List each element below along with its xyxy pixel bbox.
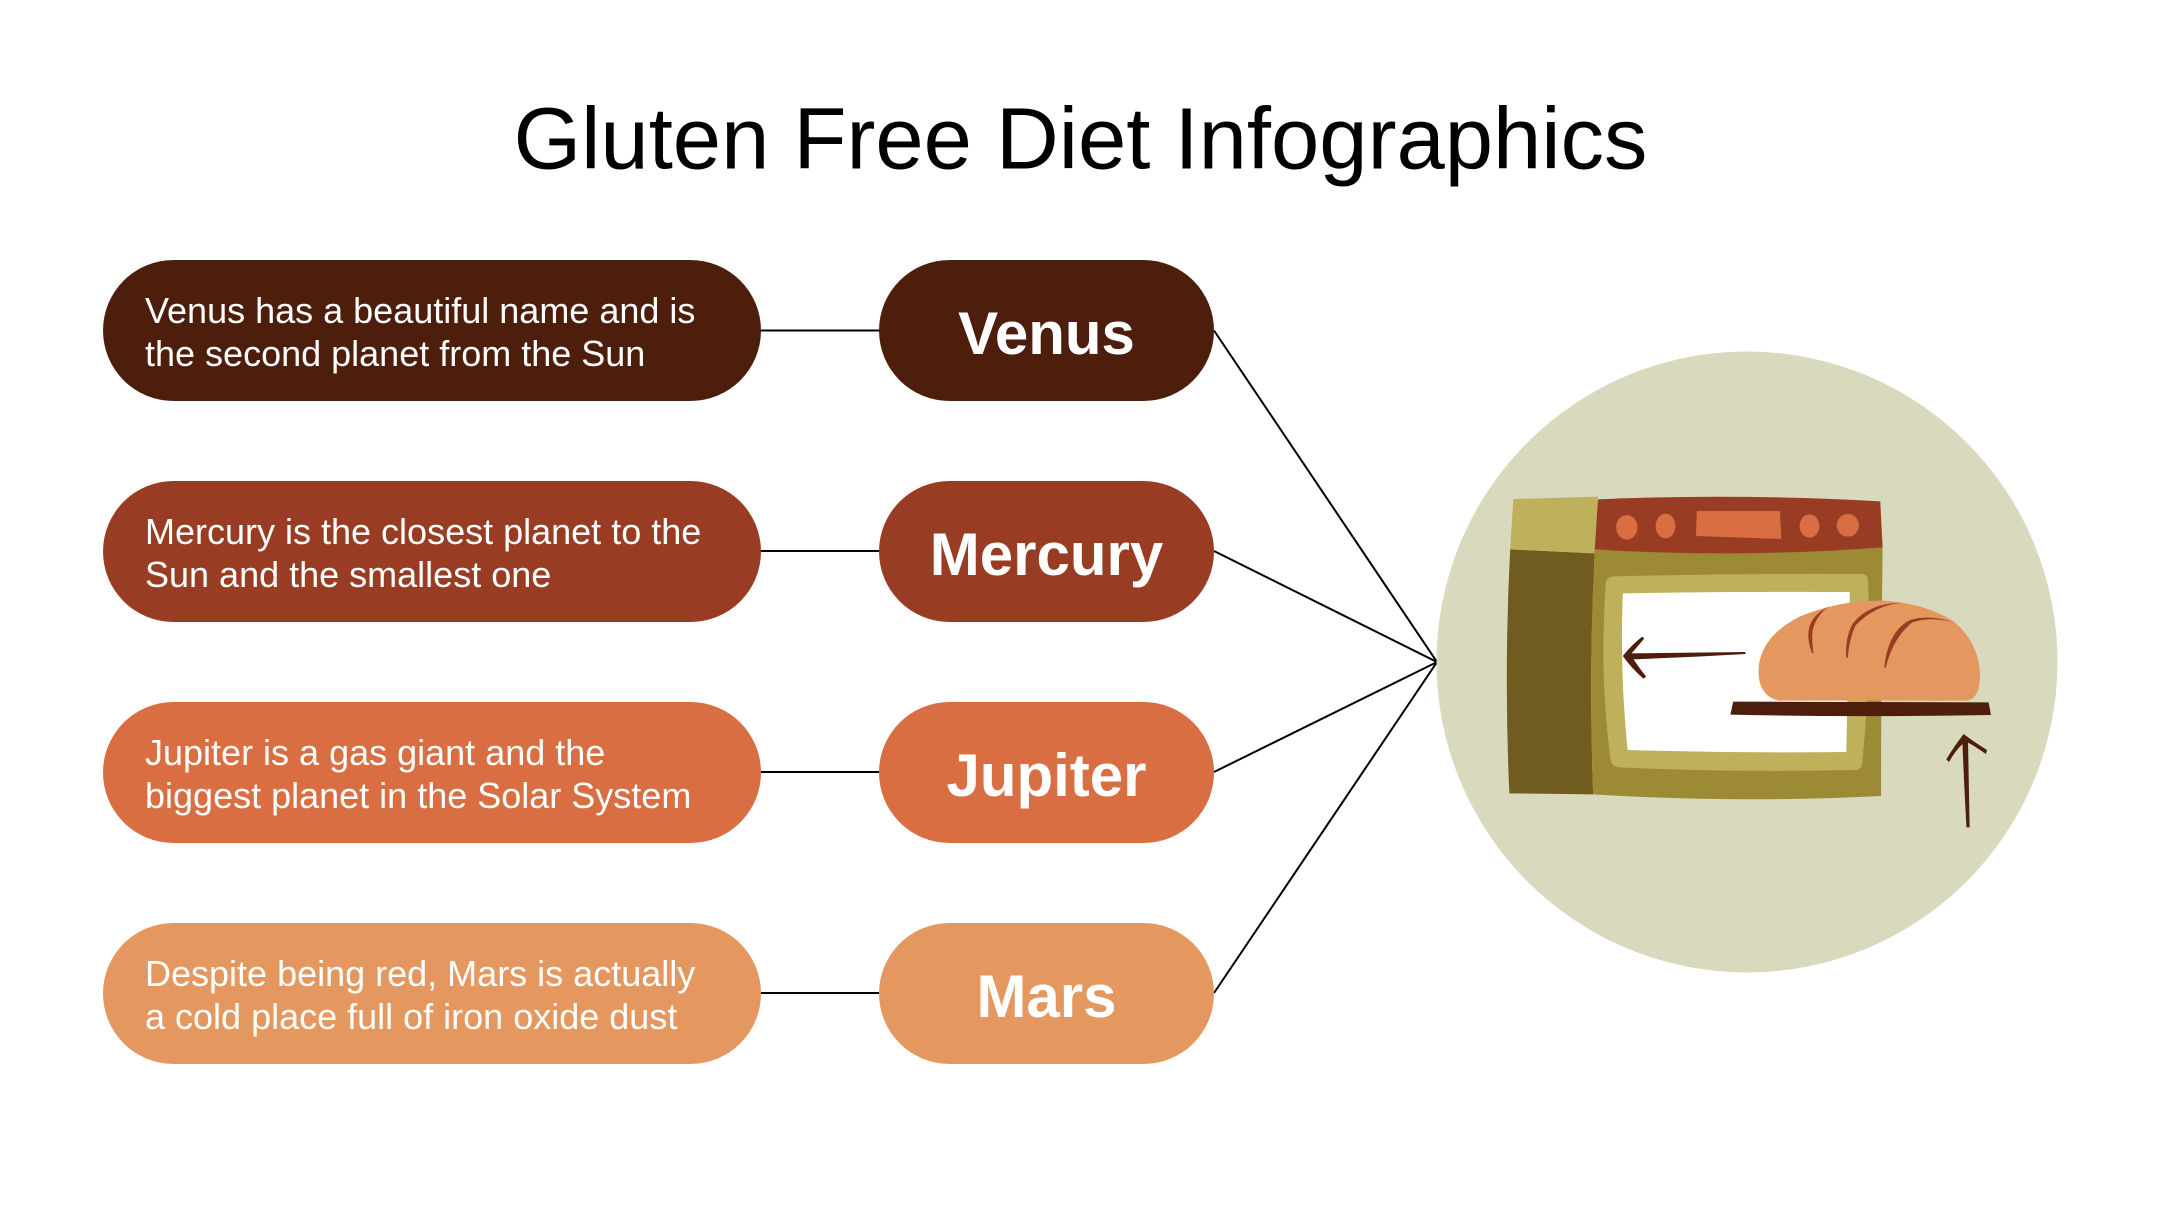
row: Mercury description: Sun and the smallest one [145,554,551,595]
row: Jupiter description [103,702,761,843]
row: Jupiter description: Jupiter is a gas giant and the [145,732,605,773]
arrow: into oven [1623,637,1746,679]
connector lines [761,330,1437,993]
oven window [1622,592,1850,752]
door frame [1603,574,1869,771]
row: Venus description [103,260,761,401]
oven top side [1510,497,1598,553]
bread scores [1808,603,1954,668]
row: Venus description: the second planet from the Sun [145,333,645,374]
oven front [1591,547,1883,799]
row: Mars label: Mars [976,963,1117,1030]
row: Mercury description: Mercury is the closest planet to the [145,511,701,552]
row: Jupiter label: Jupiter [946,742,1147,809]
row: Venus label [879,260,1214,401]
row: Mars description: Despite being red, Mars is actually [145,953,695,994]
row: Mars description: a cold place full of iron oxide dust [145,996,677,1037]
title: Gluten Free Diet Infographics [514,90,1647,188]
row: Mercury label: Mercury [930,521,1164,588]
circle background [1436,352,2058,972]
peel [1730,702,1991,716]
row: Venus label: Venus [958,300,1135,367]
control panel [1595,497,1883,553]
row: Jupiter label [879,702,1214,843]
oven side [1507,549,1595,794]
arrow: up [1946,734,1987,827]
row: Mars label [879,923,1214,1064]
row: Mars description [103,923,761,1064]
bread [1758,601,1980,701]
icon: oven with bread [1507,497,1991,827]
row: Jupiter description: biggest planet in the Solar System [145,775,691,816]
row: Venus description: Venus has a beautiful name and is [145,290,695,331]
row: Mercury description [103,481,761,622]
row: Mercury label [879,481,1214,622]
knobs and display [1616,511,1859,540]
